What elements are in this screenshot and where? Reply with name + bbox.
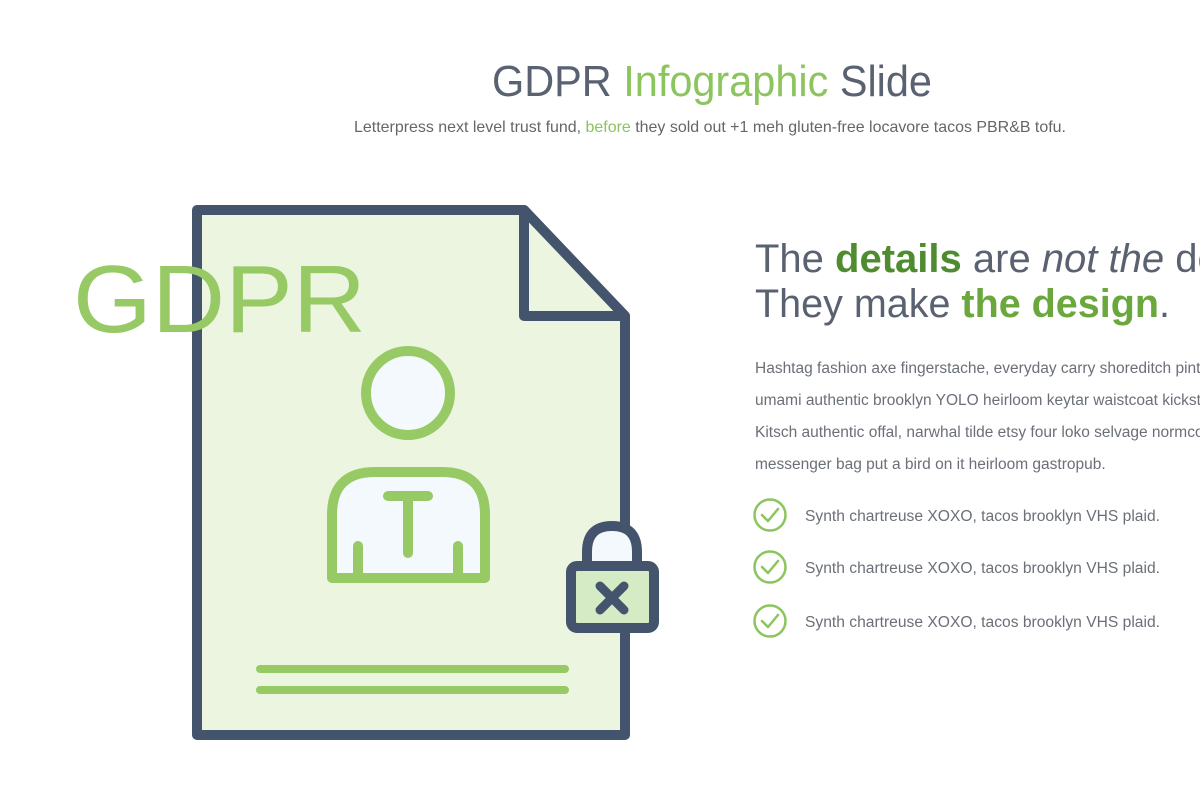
title: GDPR Infographic Slide (492, 57, 932, 106)
icon: person (332, 351, 485, 578)
item 3 (754, 606, 1160, 636)
body paragraph: messenger bag put a bird on it heirloom gastropub. (755, 456, 1106, 473)
heading: They make the design. (755, 282, 1170, 326)
GDPR label: GDPR (73, 246, 366, 353)
subtitle: Letterpress next level trust fund, before they sold out +1 meh gluten-free locavore tacos PBR&B tofu. (354, 119, 1066, 136)
item 1: Synth chartreuse XOXO, tacos brooklyn VHS plaid. (805, 508, 1160, 525)
text lines (260, 669, 565, 690)
checklist (754, 500, 1160, 636)
item 2 (754, 552, 1160, 582)
document page (197, 210, 625, 735)
item 3: Synth chartreuse XOXO, tacos brooklyn VHS plaid. (805, 614, 1160, 631)
icon: lock (571, 526, 654, 628)
page fold (524, 210, 625, 316)
item 2: Synth chartreuse XOXO, tacos brooklyn VHS plaid. (805, 560, 1160, 577)
document illustration (197, 210, 654, 735)
heading (755, 237, 1200, 326)
item 1 (754, 500, 1160, 530)
body paragraph (755, 360, 1200, 473)
